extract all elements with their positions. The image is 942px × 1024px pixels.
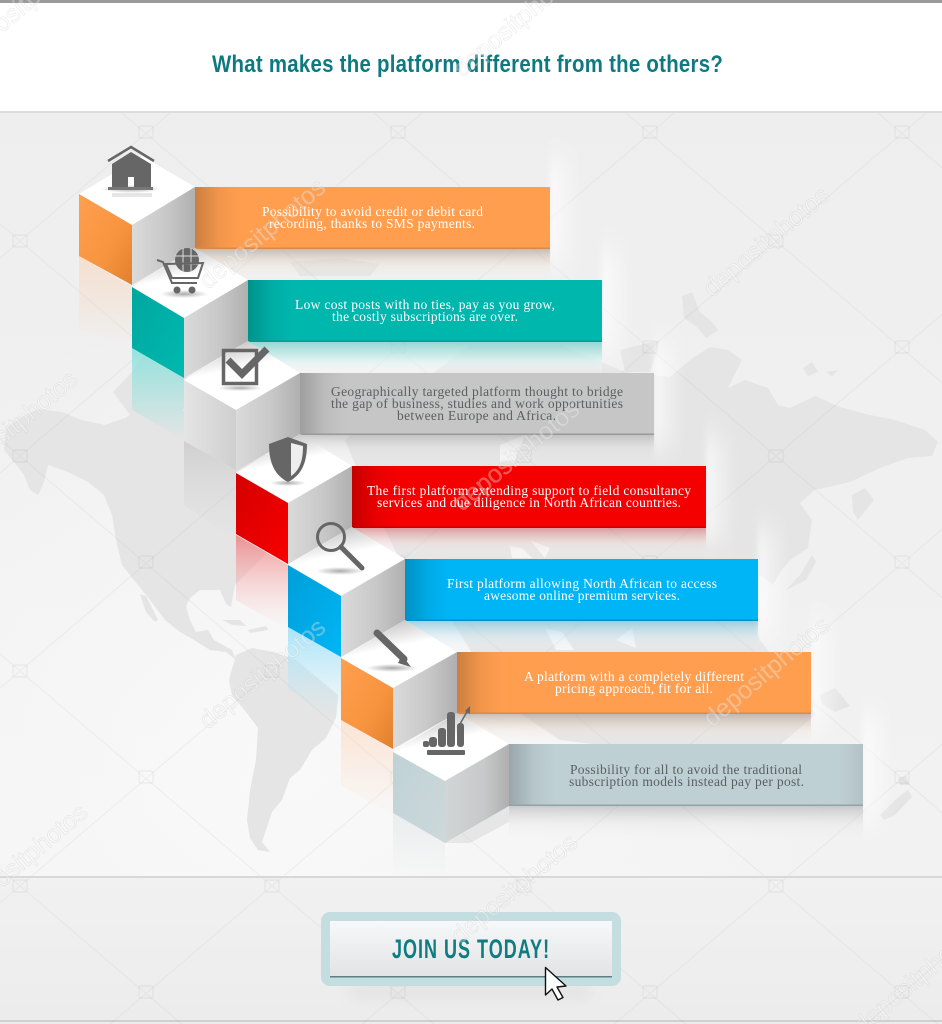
band: step 4: services and due diligence in North African countries. (377, 495, 681, 510)
step 1 glow (79, 160, 580, 345)
cube: step 6 (341, 620, 457, 749)
sea cut-outs (435, 435, 636, 651)
icon: pencil (366, 633, 418, 672)
icon: cart with globe (157, 248, 208, 298)
step 7 shadow (393, 715, 893, 880)
cube: step 2 (132, 248, 248, 378)
band: step 2: Low cost posts with no ties, pay as you grow, (295, 297, 555, 312)
button label: JOIN US TODAY! (392, 933, 549, 964)
map: scandinavia (682, 292, 718, 338)
band: step 7: Possibility for all to avoid the traditional (570, 762, 802, 777)
cube: step 7 (393, 713, 509, 843)
band: step 2: the costly subscriptions are over. (332, 309, 518, 324)
step 3 glow (184, 343, 684, 540)
map: north atlantic islands (290, 258, 660, 372)
cube: step 4 (236, 434, 352, 564)
step 5 glow (288, 529, 788, 720)
panel: step 3 gray (184, 341, 654, 471)
step 4 glow (236, 436, 736, 630)
band: step 6: A platform with a completely different (524, 669, 744, 684)
map: north america (4, 408, 300, 660)
map: arctic islands (803, 362, 838, 376)
band: step 7 (509, 744, 863, 806)
band: step 5: awesome online premium services. (484, 588, 680, 603)
step 2 glow (132, 250, 632, 440)
band: step 1: Possibility to avoid credit or debit card (262, 204, 483, 219)
panel: step 2 teal (132, 248, 602, 378)
band: step 6: pricing approach, fit for all. (555, 681, 713, 696)
watermark lattice footer (0, 878, 942, 1024)
map: south america (229, 648, 338, 852)
panel: step 7 slate (393, 706, 863, 843)
panel: step 6 orange (341, 620, 811, 749)
panel: step 4 red (236, 434, 706, 564)
panel: step 1 orange (79, 147, 550, 285)
band: step 3: between Europe and Africa. (397, 408, 556, 423)
header band (0, 0, 942, 113)
cube: step 3 (184, 341, 300, 471)
band: step 5: First platform allowing North African to access (447, 576, 717, 591)
icon: mouse cursor (546, 968, 566, 1000)
map: greenland (113, 345, 190, 432)
map: oceania (820, 688, 912, 820)
world map (4, 258, 938, 852)
map: eurasia and africa (345, 345, 938, 745)
icon: bar chart with arrow (423, 706, 470, 755)
cube: step 5 (288, 527, 405, 657)
band: step 2 (248, 280, 602, 342)
icon: check box (218, 349, 267, 391)
footer band (0, 876, 942, 1024)
band: step 1 (195, 187, 550, 249)
band: step 3: the gap of business, studies and work opportunities (331, 396, 623, 411)
band: step 3: Geographically targeted platform thought to bridge (331, 384, 623, 399)
watermark text: depositphotos (698, 611, 835, 733)
band: step 4: The first platform extending support to field consultancy (367, 483, 691, 498)
watermark text: depositphotos (194, 613, 331, 735)
band: step 6 (457, 652, 811, 714)
band: step 7: subscription models instead pay per post. (569, 774, 804, 789)
watermark text: depositphotos (448, 395, 585, 517)
band: step 1: recording, thanks to SMS payments. (269, 216, 475, 231)
watermark text: depositphotos (194, 173, 331, 295)
band: step 3 (300, 373, 654, 435)
band: step 4 (352, 466, 706, 528)
icon: shield (269, 437, 307, 486)
panel: step 5 blue (288, 524, 758, 657)
step 6 glow (341, 622, 841, 815)
band: step 5 (405, 559, 758, 621)
map: baja (140, 594, 158, 622)
watermark text: depositphotos (446, 828, 583, 950)
watermark text: depositphotos (698, 181, 835, 303)
title: What makes the platform different from the others? (212, 50, 723, 77)
icon: magnifier (316, 524, 364, 575)
cube: step 1 (79, 156, 195, 285)
map: caribbean (222, 620, 268, 633)
call to action button (321, 912, 621, 998)
map: kamchatka and japan (786, 488, 874, 590)
icon: house (101, 147, 161, 197)
